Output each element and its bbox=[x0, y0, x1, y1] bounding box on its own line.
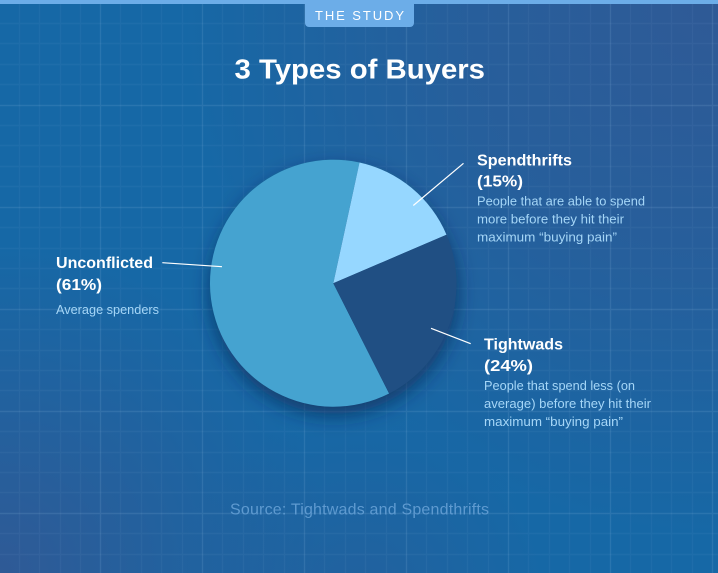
source: Source: Tightwads and Spendthrifts bbox=[230, 502, 489, 518]
heading: unconflicted bbox=[56, 255, 153, 294]
description: spendthrifts: more before they hit their bbox=[477, 212, 625, 226]
title: 3 Types of Buyers bbox=[234, 54, 485, 84]
heading: tightwads: (24%) bbox=[484, 358, 533, 375]
label: tightwads bbox=[431, 328, 652, 429]
leader line: tightwads bbox=[431, 328, 471, 344]
label: unconflicted bbox=[56, 255, 222, 317]
heading: unconflicted: (61%) bbox=[56, 277, 102, 294]
slice: tightwads 24% bbox=[333, 235, 457, 394]
top bar with tab: THE STUDY bbox=[315, 8, 404, 23]
heading: unconflicted: Unconflicted bbox=[56, 255, 153, 272]
description: spendthrifts: maximum “buying pain” bbox=[477, 230, 617, 244]
pie chart bbox=[210, 160, 457, 414]
description: tightwads: People that spend less (on bbox=[484, 378, 635, 393]
slice: spendthrifts 15% bbox=[333, 162, 446, 283]
label: spendthrifts bbox=[413, 152, 645, 244]
heading: tightwads: Tightwads bbox=[484, 336, 563, 354]
heading: spendthrifts: Spendthrifts bbox=[477, 152, 572, 170]
heading: spendthrifts bbox=[477, 152, 572, 190]
leader line: unconflicted bbox=[162, 263, 222, 267]
top bar with tab bbox=[0, 0, 718, 27]
description: spendthrifts: People that are able to spend bbox=[477, 194, 645, 208]
description: unconflicted: Average spenders bbox=[56, 302, 159, 317]
slice: unconflicted 61% bbox=[210, 160, 389, 407]
description: tightwads bbox=[484, 378, 652, 429]
description: tightwads: maximum “buying pain” bbox=[484, 414, 623, 429]
leader line: spendthrifts bbox=[413, 163, 464, 206]
description: tightwads: average) before they hit their bbox=[484, 396, 652, 411]
heading: tightwads bbox=[484, 336, 563, 375]
description: spendthrifts bbox=[477, 194, 645, 244]
heading: spendthrifts: (15%) bbox=[477, 174, 523, 190]
